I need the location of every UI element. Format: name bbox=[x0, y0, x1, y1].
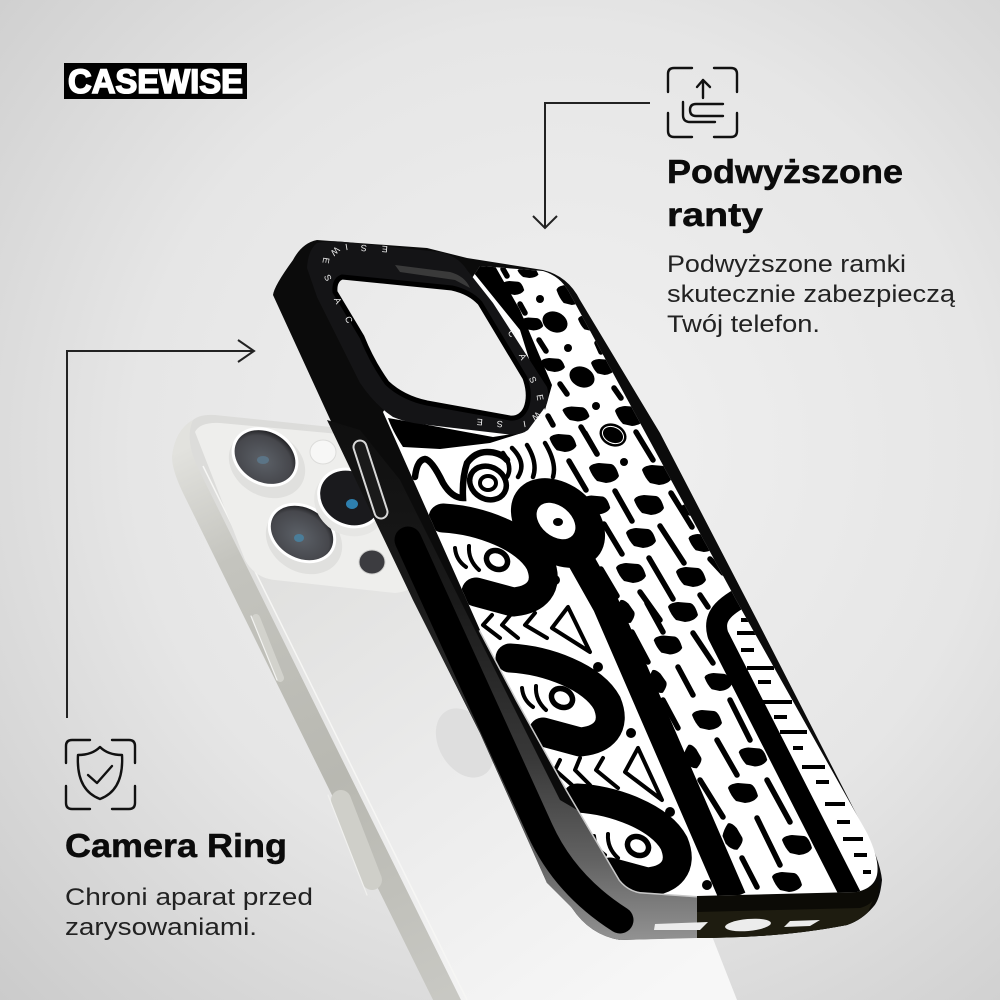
dots bbox=[536, 295, 712, 890]
ring engraved lettering: S bbox=[322, 273, 334, 283]
text: camera ring description bbox=[65, 884, 313, 941]
phone case bbox=[273, 240, 890, 940]
ovals bbox=[542, 311, 627, 447]
ring engraved lettering: E bbox=[381, 244, 388, 254]
ring engraved lettering: I bbox=[522, 419, 527, 429]
lens: upper left bbox=[216, 415, 318, 512]
band beside camera ring bbox=[474, 266, 552, 410]
side buttons bbox=[251, 616, 372, 895]
text: raised edges description: Podwyższone ramki bbox=[667, 251, 906, 278]
blob under camera ring bbox=[388, 418, 525, 449]
eye ring bbox=[510, 478, 606, 568]
text: raised edges description: Twój telefon. bbox=[667, 311, 820, 338]
ring engraved lettering: S bbox=[360, 243, 367, 253]
heading: camera ring: Camera Ring bbox=[65, 827, 287, 864]
ring engraved lettering: I bbox=[344, 242, 349, 252]
speaker and port holes bbox=[654, 917, 820, 933]
repeated motifs bbox=[443, 518, 677, 882]
ring body bbox=[307, 241, 548, 434]
camera ring bbox=[307, 241, 548, 434]
ring engraved lettering: S bbox=[527, 375, 539, 385]
ring engraved lettering: W bbox=[328, 245, 342, 258]
camera plateau bbox=[195, 423, 421, 593]
lens: lower bbox=[253, 491, 355, 588]
logo: CASEWISE bbox=[68, 63, 243, 101]
phone back bbox=[172, 415, 737, 1000]
bottom band right bbox=[697, 880, 878, 938]
icon: shield bbox=[66, 740, 135, 809]
case edge over phone bbox=[327, 420, 697, 940]
ring engraved lettering: W bbox=[529, 410, 543, 423]
text: camera ring description: zarysowaniami. bbox=[65, 914, 257, 941]
ring engraved lettering: C bbox=[343, 315, 355, 325]
arrow: camera ring bbox=[67, 340, 254, 718]
ring engraved lettering: C bbox=[506, 329, 518, 339]
ring opening bbox=[335, 277, 528, 418]
ring engraved lettering: E bbox=[321, 257, 331, 264]
case body bbox=[273, 240, 882, 940]
text: raised edges description bbox=[667, 251, 956, 338]
flash bbox=[310, 440, 336, 464]
printed artwork bbox=[370, 255, 890, 905]
ring engraved lettering: E bbox=[476, 417, 483, 427]
heading: raised edges bbox=[667, 153, 903, 233]
heading: raised edges: Podwyższone bbox=[667, 153, 903, 190]
ring engraved lettering: E bbox=[535, 394, 545, 401]
dashes bbox=[503, 269, 790, 887]
arrow: raised edges bbox=[533, 103, 650, 228]
phone side band bbox=[172, 420, 461, 1000]
snake and spiral bbox=[415, 443, 554, 506]
lens: right bbox=[302, 456, 398, 549]
inner black band bbox=[408, 540, 620, 920]
icon: raised edges bbox=[668, 68, 737, 137]
ring engraved lettering: S bbox=[496, 419, 503, 429]
translucent inner rim highlight bbox=[480, 630, 697, 896]
white phone bbox=[172, 415, 737, 1000]
blobs bbox=[502, 268, 812, 892]
sensor bbox=[359, 550, 385, 574]
heading: raised edges: ranty bbox=[667, 196, 764, 233]
ring engraved lettering bbox=[321, 242, 545, 429]
right-side ticks bbox=[737, 620, 871, 872]
text: camera ring description: Chroni aparat przed bbox=[65, 884, 313, 911]
ring engraved lettering: A bbox=[332, 296, 344, 306]
vertical stripes bbox=[575, 550, 852, 898]
text: raised edges description: skutecznie zabezpieczą bbox=[667, 281, 956, 308]
apple logo bbox=[424, 698, 506, 788]
ring engraved lettering: A bbox=[517, 352, 529, 362]
side button bbox=[360, 447, 381, 512]
